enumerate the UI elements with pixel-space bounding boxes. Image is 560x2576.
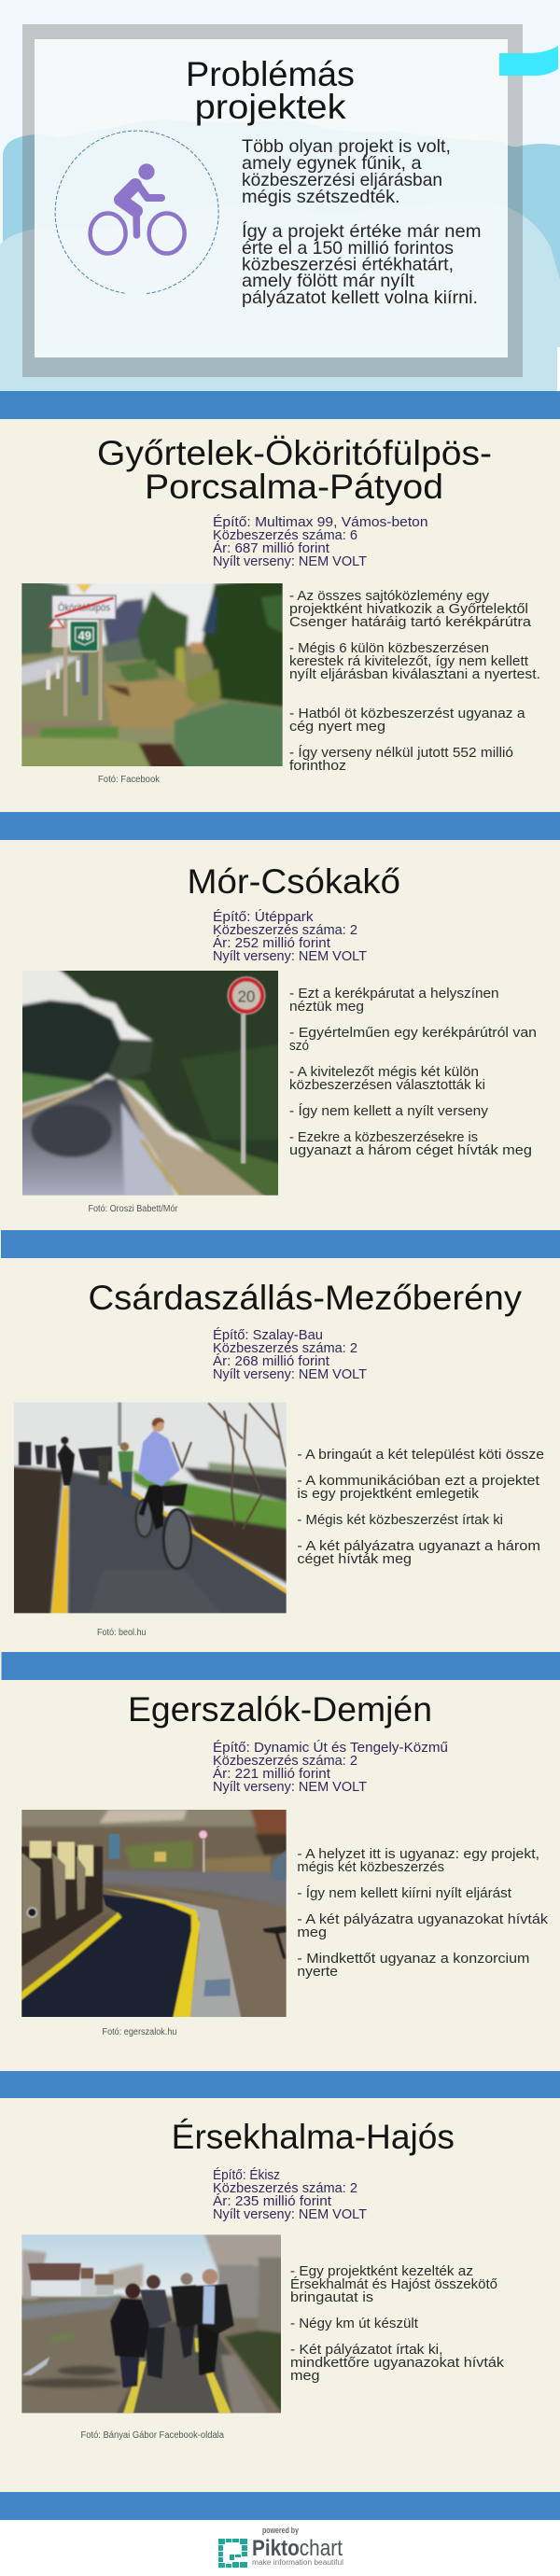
facts: Ár: 235 millió forint bbox=[213, 2193, 332, 2209]
bullet list: - A bringaút a két települést köti össze bbox=[297, 1447, 544, 1463]
bullet list: - Így nem kellett a nyílt verseny bbox=[289, 1103, 489, 1119]
facts: Ár: 268 millió forint bbox=[213, 1353, 330, 1369]
title: projektek bbox=[195, 88, 346, 126]
panel: Csárdaszállás-Mezőberény bbox=[7, 1279, 544, 1638]
bullet list: is egy projektként emlegetik bbox=[297, 1486, 480, 1502]
photo: cyclist on new path bbox=[7, 1395, 291, 1619]
heading: Egerszalók-Demjén bbox=[128, 1690, 432, 1729]
panel: Érsekhalma-Hajós bbox=[16, 2118, 505, 2441]
heading: Porcsalma-Pátyod bbox=[145, 468, 443, 506]
bullet list: - A kivitelezőt mégis két külön bbox=[289, 1064, 479, 1080]
bullet list bbox=[297, 1846, 549, 1980]
facts: Nyílt verseny: NEM VOLT bbox=[213, 948, 367, 964]
photo: road sign: Ököritófülpös bbox=[58, 603, 110, 614]
facts: Építő: Ékisz bbox=[213, 2167, 280, 2183]
photo credit: Fotó: Oroszi Babett/Mór bbox=[88, 1204, 178, 1214]
bullet list: - A két pályázatra ugyanazt a három bbox=[297, 1538, 540, 1554]
bullet list: - A helyzet itt is ugyanaz: egy projekt, bbox=[297, 1846, 539, 1862]
text block: intro: amely fölött már nyílt bbox=[242, 271, 415, 291]
facts: Nyílt verseny: NEM VOLT bbox=[213, 1366, 367, 1382]
footer: Piktochart logo: make information beautiful bbox=[252, 2558, 343, 2567]
panel: Egerszalók-Demjén bbox=[16, 1690, 549, 2037]
heading: Csárdaszállás-Mezőberény bbox=[88, 1279, 523, 1317]
footer: Piktochart logo: powered by bbox=[262, 2526, 299, 2535]
bullet list: nyílt eljárásban kiválasztani a nyertest. bbox=[289, 666, 540, 682]
facts bbox=[213, 514, 427, 569]
heading bbox=[97, 434, 492, 506]
facts: Nyílt verseny: NEM VOLT bbox=[213, 553, 367, 569]
photo: wet road with speed sign: 20 bbox=[238, 987, 255, 1005]
bullet list: - Egyértelműen egy kerékpárútról van bbox=[289, 1025, 537, 1041]
facts bbox=[213, 1740, 448, 1795]
photo: road sign: 49 bbox=[78, 630, 91, 643]
facts: Közbeszerzés száma: 2 bbox=[213, 922, 357, 938]
bullet list: bringautat is bbox=[290, 2289, 373, 2305]
photo credit: Fotó: egerszalok.hu bbox=[103, 2027, 177, 2037]
bullet list: - Az összes sajtóközlemény egy bbox=[289, 588, 490, 604]
text block: intro: érte el a 150 millió forintos bbox=[242, 238, 454, 259]
bullet list: forinthoz bbox=[289, 758, 346, 774]
text block: intro: Így a projekt értéke már nem bbox=[242, 220, 482, 242]
photo: people walking on bike path bbox=[16, 2229, 287, 2419]
bullet list: - Négy km út készült bbox=[290, 2316, 419, 2331]
facts: Építő: Dynamic Út és Tengely-Közmű bbox=[213, 1740, 448, 1756]
facts: Építő: Multimax 99, Vámos-beton bbox=[213, 514, 427, 530]
photo credit: Fotó: Bányai Gábor Facebook-oldala bbox=[80, 2430, 224, 2441]
bullet list: - Így verseny nélkül jutott 552 millió bbox=[289, 745, 513, 761]
facts: Építő: Útéppark bbox=[213, 909, 314, 925]
bullet list: nyerte bbox=[297, 1964, 338, 1980]
title bbox=[186, 55, 355, 126]
bullet list: meg bbox=[297, 1925, 327, 1940]
facts: Közbeszerzés száma: 2 bbox=[213, 1340, 357, 1356]
facts: Nyílt verseny: NEM VOLT bbox=[213, 2206, 367, 2222]
bullet list: - Így nem kellett kiírni nyílt eljárást bbox=[297, 1885, 512, 1901]
facts: Ár: 687 millió forint bbox=[213, 540, 330, 556]
bullet list: céget hívták meg bbox=[297, 1551, 412, 1567]
photo: curved bike path bbox=[16, 1804, 292, 2023]
bullet list: szó bbox=[289, 1038, 309, 1054]
text block: intro: közbeszerzési értékhatárt, bbox=[242, 254, 454, 274]
bullet list: - Mégis két közbeszerzést írtak ki bbox=[297, 1512, 503, 1528]
facts: Építő: Szalay-Bau bbox=[213, 1327, 323, 1343]
bullet list: - A kommunikációban ezt a projektet bbox=[297, 1473, 540, 1489]
text block: intro: mégis szétszedték. bbox=[242, 187, 400, 207]
text block: intro bbox=[242, 136, 482, 308]
text block: intro: közbeszerzési eljárásban bbox=[242, 170, 442, 190]
bullet list: Csenger határáig tartó kerékpárútra bbox=[289, 614, 532, 630]
photo credit: Fotó: beol.hu bbox=[97, 1628, 146, 1638]
footer: Piktochart logo bbox=[218, 2526, 343, 2568]
bullet list: - Egy projektként kezelték az bbox=[290, 2263, 473, 2279]
bullet list: mindkettőre ugyanazokat hívták bbox=[290, 2355, 505, 2371]
bullet list: - Két pályázatot írtak ki, bbox=[290, 2342, 442, 2358]
bullet list: cég nyert meg bbox=[289, 719, 385, 735]
facts: Ár: 221 millió forint bbox=[213, 1766, 331, 1782]
footer: Piktochart logo: Piktochart bbox=[252, 2536, 343, 2561]
text block: intro: amely egynek fűnik, a bbox=[242, 153, 422, 174]
text block: intro: pályázatot kellett volna kiírni. bbox=[242, 287, 478, 308]
photo: road sign bbox=[21, 583, 283, 766]
photo credit: Fotó: Facebook bbox=[98, 775, 161, 785]
heading: Érsekhalma-Hajós bbox=[172, 2118, 455, 2156]
text block: intro: Több olyan projekt is volt, bbox=[242, 136, 451, 157]
facts: Közbeszerzés száma: 2 bbox=[213, 2180, 357, 2196]
heading: Mór-Csókakő bbox=[187, 862, 400, 901]
icon: Piktochart mark bbox=[218, 2539, 247, 2568]
bullet list: projektként hivatkozik a Győrtelektől bbox=[289, 601, 528, 617]
bullet list: mégis két közbeszerzés bbox=[297, 1859, 444, 1875]
bullet list: közbeszerzésen választották ki bbox=[289, 1077, 485, 1093]
panel: Mór-Csókakő bbox=[16, 862, 537, 1214]
bullet list bbox=[289, 986, 537, 1158]
bullet list: néztük meg bbox=[289, 999, 364, 1015]
icon: cyclist in dashed circle bbox=[55, 131, 218, 293]
bullet list bbox=[289, 588, 540, 774]
facts bbox=[213, 909, 367, 964]
bullet list: - Mindkettőt ugyanaz a konzorcium bbox=[297, 1951, 529, 1967]
bullet list: meg bbox=[290, 2368, 319, 2384]
bullet list: Érsekhalmát és Hajóst összekötő bbox=[290, 2276, 497, 2292]
bullet list: ugyanazt a három céget hívták meg bbox=[289, 1142, 532, 1158]
facts: Ár: 252 millió forint bbox=[213, 935, 331, 951]
bullet list: kerestek rá kivitelezőt, így nem kellett bbox=[289, 653, 529, 669]
facts: Közbeszerzés száma: 2 bbox=[213, 1753, 357, 1769]
bullet list: - Ezekre a közbeszerzésekre is bbox=[289, 1129, 478, 1145]
panel: header bbox=[0, 0, 560, 391]
facts bbox=[213, 1327, 367, 1382]
facts: Közbeszerzés száma: 6 bbox=[213, 527, 357, 543]
facts: Nyílt verseny: NEM VOLT bbox=[213, 1779, 367, 1795]
facts bbox=[213, 2167, 367, 2222]
title: Problémás bbox=[186, 55, 355, 93]
panel: Győrtelek bbox=[16, 434, 540, 785]
bullet list: - A két pályázatra ugyanazokat hívták bbox=[297, 1911, 549, 1927]
photo: wet road with speed sign bbox=[22, 971, 278, 1196]
heading: Győrtelek-Ököritófülpös- bbox=[97, 434, 492, 472]
bullet list: - Ezt a kerékpárutat a helyszínen bbox=[289, 986, 499, 1001]
bullet list bbox=[297, 1447, 544, 1567]
bullet list bbox=[290, 2263, 505, 2384]
bullet list: - Hatból öt közbeszerzést ugyanaz a bbox=[289, 706, 525, 721]
bullet list: - Mégis 6 külön közbeszerzésen bbox=[289, 640, 489, 656]
